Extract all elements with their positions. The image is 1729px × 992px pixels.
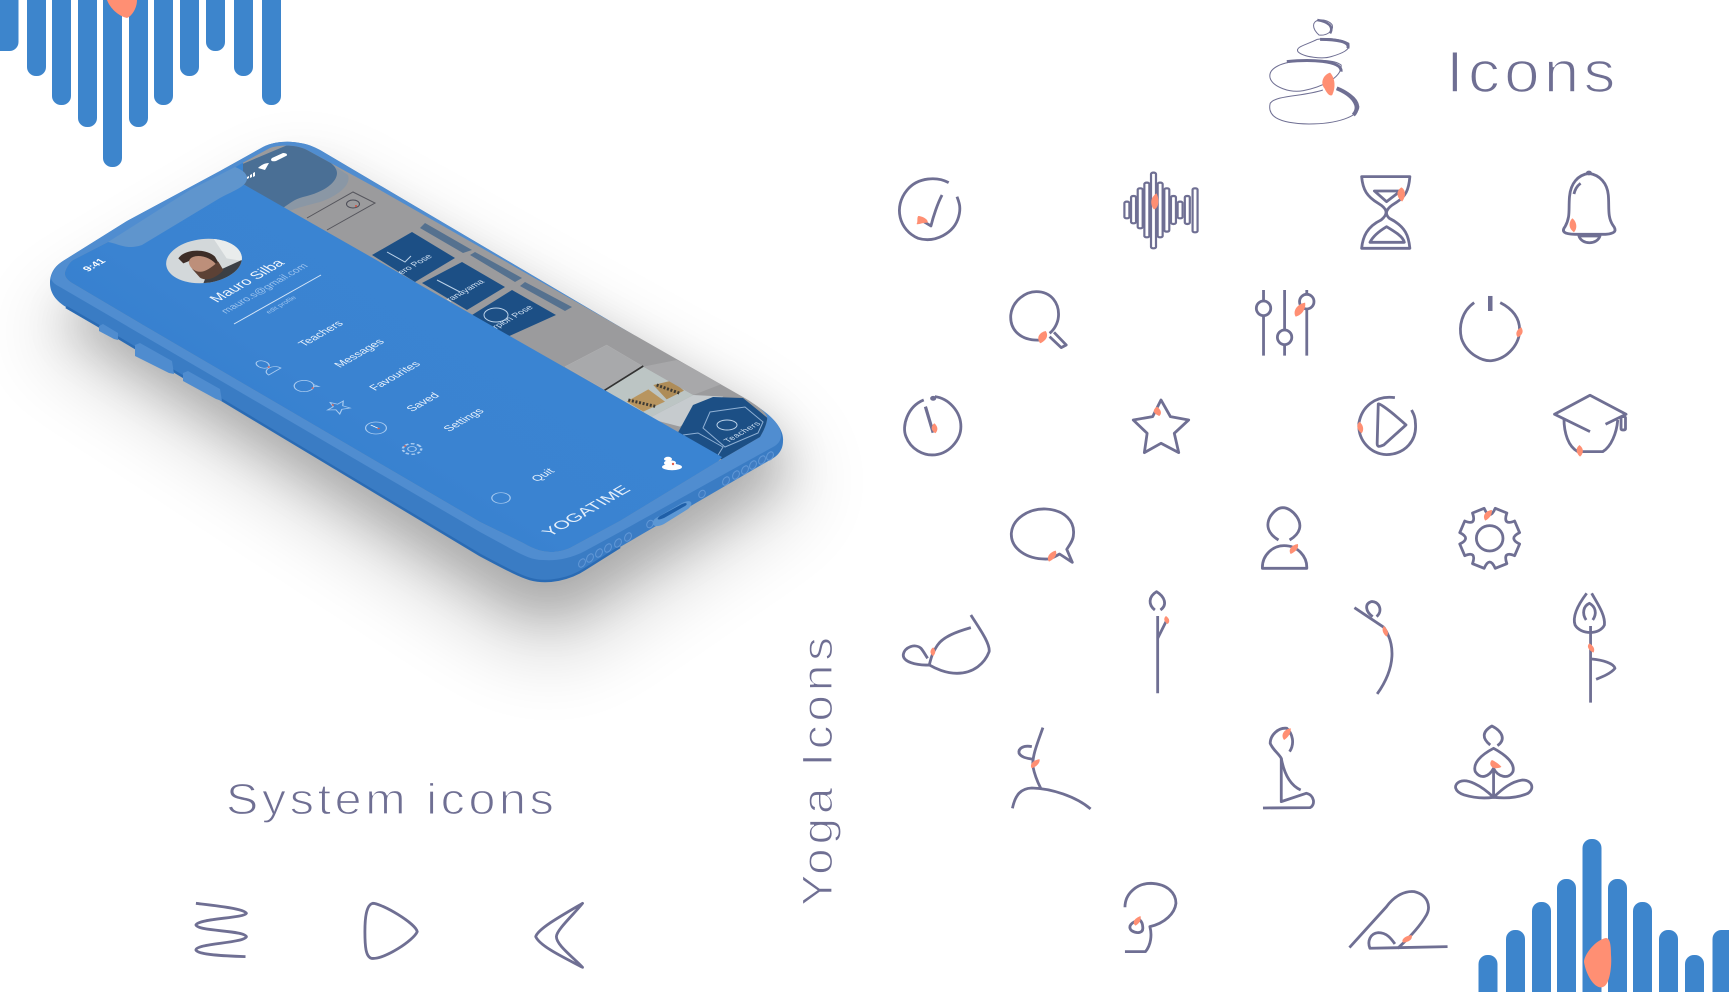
- pose cards: Pranayama: [438, 278, 487, 306]
- icon: power: [1460, 296, 1523, 361]
- menu: quit: Quit: [529, 467, 558, 484]
- menu: saved: Saved: [404, 391, 443, 414]
- menu: settings: Settings: [441, 407, 487, 434]
- icon: bell: [1563, 172, 1615, 243]
- icon: gear: [1460, 508, 1520, 568]
- icon: waveform: [1124, 173, 1198, 248]
- top decorative sound bars: [0, 0, 281, 167]
- yoga pose: bridge: [903, 615, 989, 673]
- status bar light band: [284, 166, 348, 210]
- profile avatar: [166, 238, 242, 284]
- menu icon: quit: [488, 490, 514, 506]
- drawer background: [64, 162, 722, 552]
- yoga pose: mountain: [1150, 592, 1169, 693]
- icon: graduation cap: [1555, 395, 1626, 457]
- edit profile: edit profile: [265, 295, 299, 315]
- pose cards: Scorpion Pose: [476, 304, 535, 338]
- menu: teachers: Teachers: [296, 319, 347, 349]
- heading: System icons: System icons: [226, 774, 554, 824]
- time: 9:41: [81, 257, 109, 274]
- charging port: [653, 501, 691, 526]
- menu icon: person: [251, 358, 281, 375]
- yoga pose: tree: [1574, 593, 1615, 703]
- pose cards: [372, 232, 556, 338]
- menu icon: star: [322, 398, 353, 416]
- notch: [108, 167, 247, 247]
- search box: [307, 192, 375, 230]
- icon: star: [1133, 400, 1189, 453]
- system icon: play: [365, 903, 417, 958]
- heading: Yoga Icons: Yoga Icons: [793, 637, 842, 906]
- status icons: [247, 153, 287, 179]
- yoga pose: lotus: [1456, 726, 1532, 798]
- phone body: [50, 142, 783, 581]
- system icon: back: [536, 903, 583, 967]
- profile name: Mauro Silba: [207, 257, 289, 305]
- menu icon: gear: [399, 441, 425, 456]
- icon: person: [1262, 508, 1307, 568]
- teachers hexagon tab: [675, 397, 770, 460]
- status bar backdrop: [240, 144, 337, 208]
- speaker holes: [577, 451, 775, 568]
- teachers hexagon tab: Teachers: [721, 420, 763, 444]
- heading: Icons: Icons: [1446, 40, 1615, 104]
- yoga pose: forward bend: [1349, 891, 1448, 948]
- pose cards: Hero Pose: [389, 253, 434, 279]
- yoga pose: standing bend: [1354, 602, 1392, 694]
- phone front rim: [51, 142, 781, 560]
- menu icon: clock: [361, 420, 391, 436]
- panel: phone mockup: [30, 130, 810, 655]
- logo: stacked stones: [1270, 20, 1359, 124]
- icon: check circle: [899, 179, 960, 240]
- menu icon: chat: [290, 378, 319, 394]
- app logo small: [662, 457, 682, 470]
- side buttons: [99, 324, 222, 401]
- photo card: [565, 345, 723, 427]
- profile email: mauro.s@gmail.com: [219, 262, 311, 316]
- menu: favourites: Favourites: [367, 360, 424, 393]
- icon: chat bubble: [1011, 509, 1074, 562]
- icon: sliders: [1256, 290, 1314, 356]
- icon: search: [1011, 292, 1066, 348]
- phone shadow: [30, 170, 810, 655]
- bottom decorative sound bars: [1478, 839, 1729, 992]
- phone screen: [64, 146, 768, 552]
- icon: hourglass: [1362, 177, 1410, 248]
- yoga pose: lunge: [1012, 728, 1091, 809]
- yoga pose: seated: [1263, 728, 1314, 808]
- body lower edge shade: [66, 307, 620, 581]
- yoga pose: head to knee: [1125, 883, 1176, 952]
- search icon small: [346, 200, 360, 208]
- icon: play circle: [1357, 397, 1416, 455]
- pose card strips: [420, 223, 572, 311]
- app name: YOGATIME: [539, 483, 635, 539]
- icon: timer: [905, 397, 961, 455]
- system icon: menu: [196, 903, 246, 957]
- menu: messages: Messages: [332, 337, 388, 370]
